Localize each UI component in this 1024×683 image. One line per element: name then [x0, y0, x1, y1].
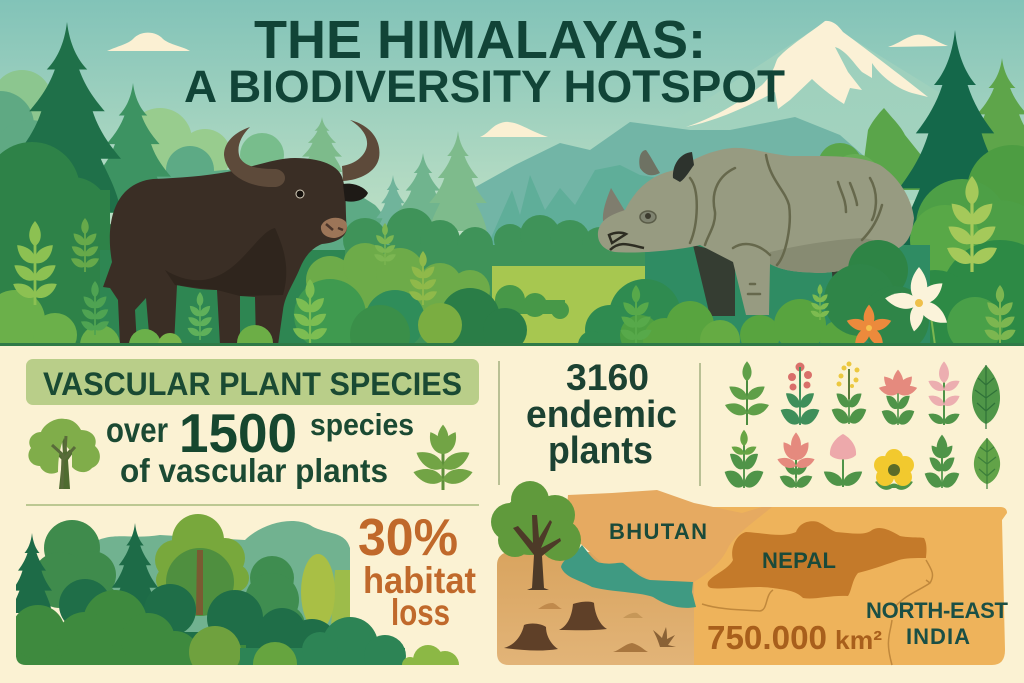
icon: leafy sprig	[412, 425, 474, 490]
stat: 3160 endemic plants	[526, 357, 677, 472]
text: of vascular plants: of vascular plants	[120, 452, 388, 489]
rhino eye	[640, 211, 656, 223]
mountain body	[739, 32, 919, 200]
text: habitat: habitat	[363, 560, 476, 601]
meadow bushes	[495, 285, 569, 319]
buffalo eye	[296, 190, 304, 198]
buffalo ear	[343, 184, 368, 202]
text: species: species	[310, 407, 414, 442]
text: plants: plants	[548, 430, 653, 472]
front bushes	[11, 590, 459, 683]
light pines behind	[302, 117, 487, 235]
rhino skin folds	[690, 155, 882, 294]
distant forest silhouette	[492, 165, 654, 245]
icon: tree	[28, 419, 100, 489]
map: stumps	[504, 602, 676, 652]
round tree	[32, 520, 119, 629]
plant 2	[779, 362, 821, 428]
rhino belly shade	[770, 238, 873, 273]
buffalo horns	[224, 120, 379, 187]
rhino mouth	[609, 233, 644, 250]
cloud centre	[480, 122, 548, 137]
map: small sprout	[653, 627, 676, 647]
divider	[699, 363, 701, 486]
foreground bushes left	[0, 279, 410, 365]
buffalo body	[103, 158, 347, 345]
plant 12	[974, 438, 1000, 489]
orange flower	[845, 305, 893, 350]
right side bushes	[910, 145, 1024, 343]
plant 8	[776, 432, 816, 491]
left background hills	[0, 70, 400, 260]
buffalo shadow belly	[165, 228, 286, 296]
buffalo muzzle	[321, 218, 347, 238]
panel: habitat map	[491, 481, 1009, 665]
lime background tree	[330, 570, 350, 640]
distant teal mountains	[476, 117, 864, 238]
map label: Nepal: NEPAL	[762, 548, 836, 573]
plant 6	[972, 365, 1000, 429]
map: teal region	[561, 545, 696, 608]
heading text: VASCULAR PLANT SPECIES	[43, 366, 462, 402]
map label: Bhutan: BHUTAN	[609, 519, 707, 544]
number: 30%: 30%	[358, 509, 458, 567]
rhino near ear	[673, 152, 694, 182]
forest illustration	[11, 514, 459, 683]
second pine left	[104, 84, 171, 213]
cloud right	[888, 35, 948, 47]
mountain snow cap	[686, 21, 928, 127]
sky	[0, 0, 1024, 236]
pine right behind	[979, 58, 1024, 152]
mid treeline	[343, 208, 645, 343]
map base: orange land	[690, 507, 1007, 665]
stat: 30% habitat loss	[358, 509, 476, 633]
pine 1	[12, 533, 52, 613]
plant 10	[874, 449, 914, 492]
plant 4	[878, 370, 918, 428]
number: 3160: 3160	[566, 357, 649, 398]
title	[184, 10, 785, 112]
area unit: km²	[835, 625, 882, 655]
heading badge	[26, 359, 479, 405]
map: tree	[491, 481, 581, 590]
rhino	[598, 148, 914, 316]
divider	[26, 504, 479, 506]
plant 1	[723, 361, 771, 425]
ferns and plants	[10, 176, 1018, 345]
map label: North-East: NORTH-EAST	[866, 598, 1009, 623]
plant 3	[830, 362, 868, 427]
green mid bushes	[306, 243, 490, 310]
left dark forest bushes	[0, 142, 360, 346]
map: tan deforested ground	[497, 552, 694, 665]
map: upper region	[565, 490, 772, 582]
title line 2: A BIODIVERSITY HOTSPOT	[184, 61, 785, 112]
band edge	[0, 343, 1024, 346]
light green tree	[155, 514, 249, 616]
rhino far ear	[639, 150, 660, 175]
map: Nepal region	[708, 521, 926, 598]
meadow	[492, 266, 648, 346]
map: mounds	[613, 643, 648, 652]
text: endemic: endemic	[526, 394, 677, 436]
panel: vascular plant species	[26, 359, 479, 490]
large pine right	[901, 30, 994, 245]
rhino dark legs	[693, 246, 838, 316]
plant 7	[723, 430, 765, 492]
text: loss: loss	[391, 592, 450, 633]
teal hills	[90, 521, 350, 640]
lime tree	[301, 554, 335, 630]
dark bushes	[16, 579, 338, 671]
illustration: Himalayan landscape	[0, 0, 1024, 365]
green tree	[245, 556, 305, 645]
dark front bushes centre	[368, 245, 930, 343]
cloud left	[107, 33, 190, 51]
white flower	[884, 267, 952, 346]
plant 5	[926, 361, 962, 427]
plant 9	[821, 434, 865, 489]
title line 1: THE HIMALAYAS:	[254, 10, 706, 70]
area figure: 750.000	[707, 619, 827, 656]
text: over: over	[106, 411, 168, 450]
large pine left	[26, 22, 121, 212]
green trees right	[820, 108, 920, 190]
pine 2	[112, 523, 158, 613]
buffalo	[103, 120, 379, 345]
map label: India: INDIA	[906, 624, 970, 649]
foreground bushes right	[578, 240, 1003, 362]
rhino body	[598, 148, 914, 315]
plant 11	[923, 435, 961, 491]
number: 1500: 1500	[179, 402, 297, 464]
map: borders	[702, 560, 933, 665]
icon grid: endemic plants	[723, 361, 1000, 492]
divider	[498, 361, 500, 485]
rhino horn	[602, 188, 624, 221]
